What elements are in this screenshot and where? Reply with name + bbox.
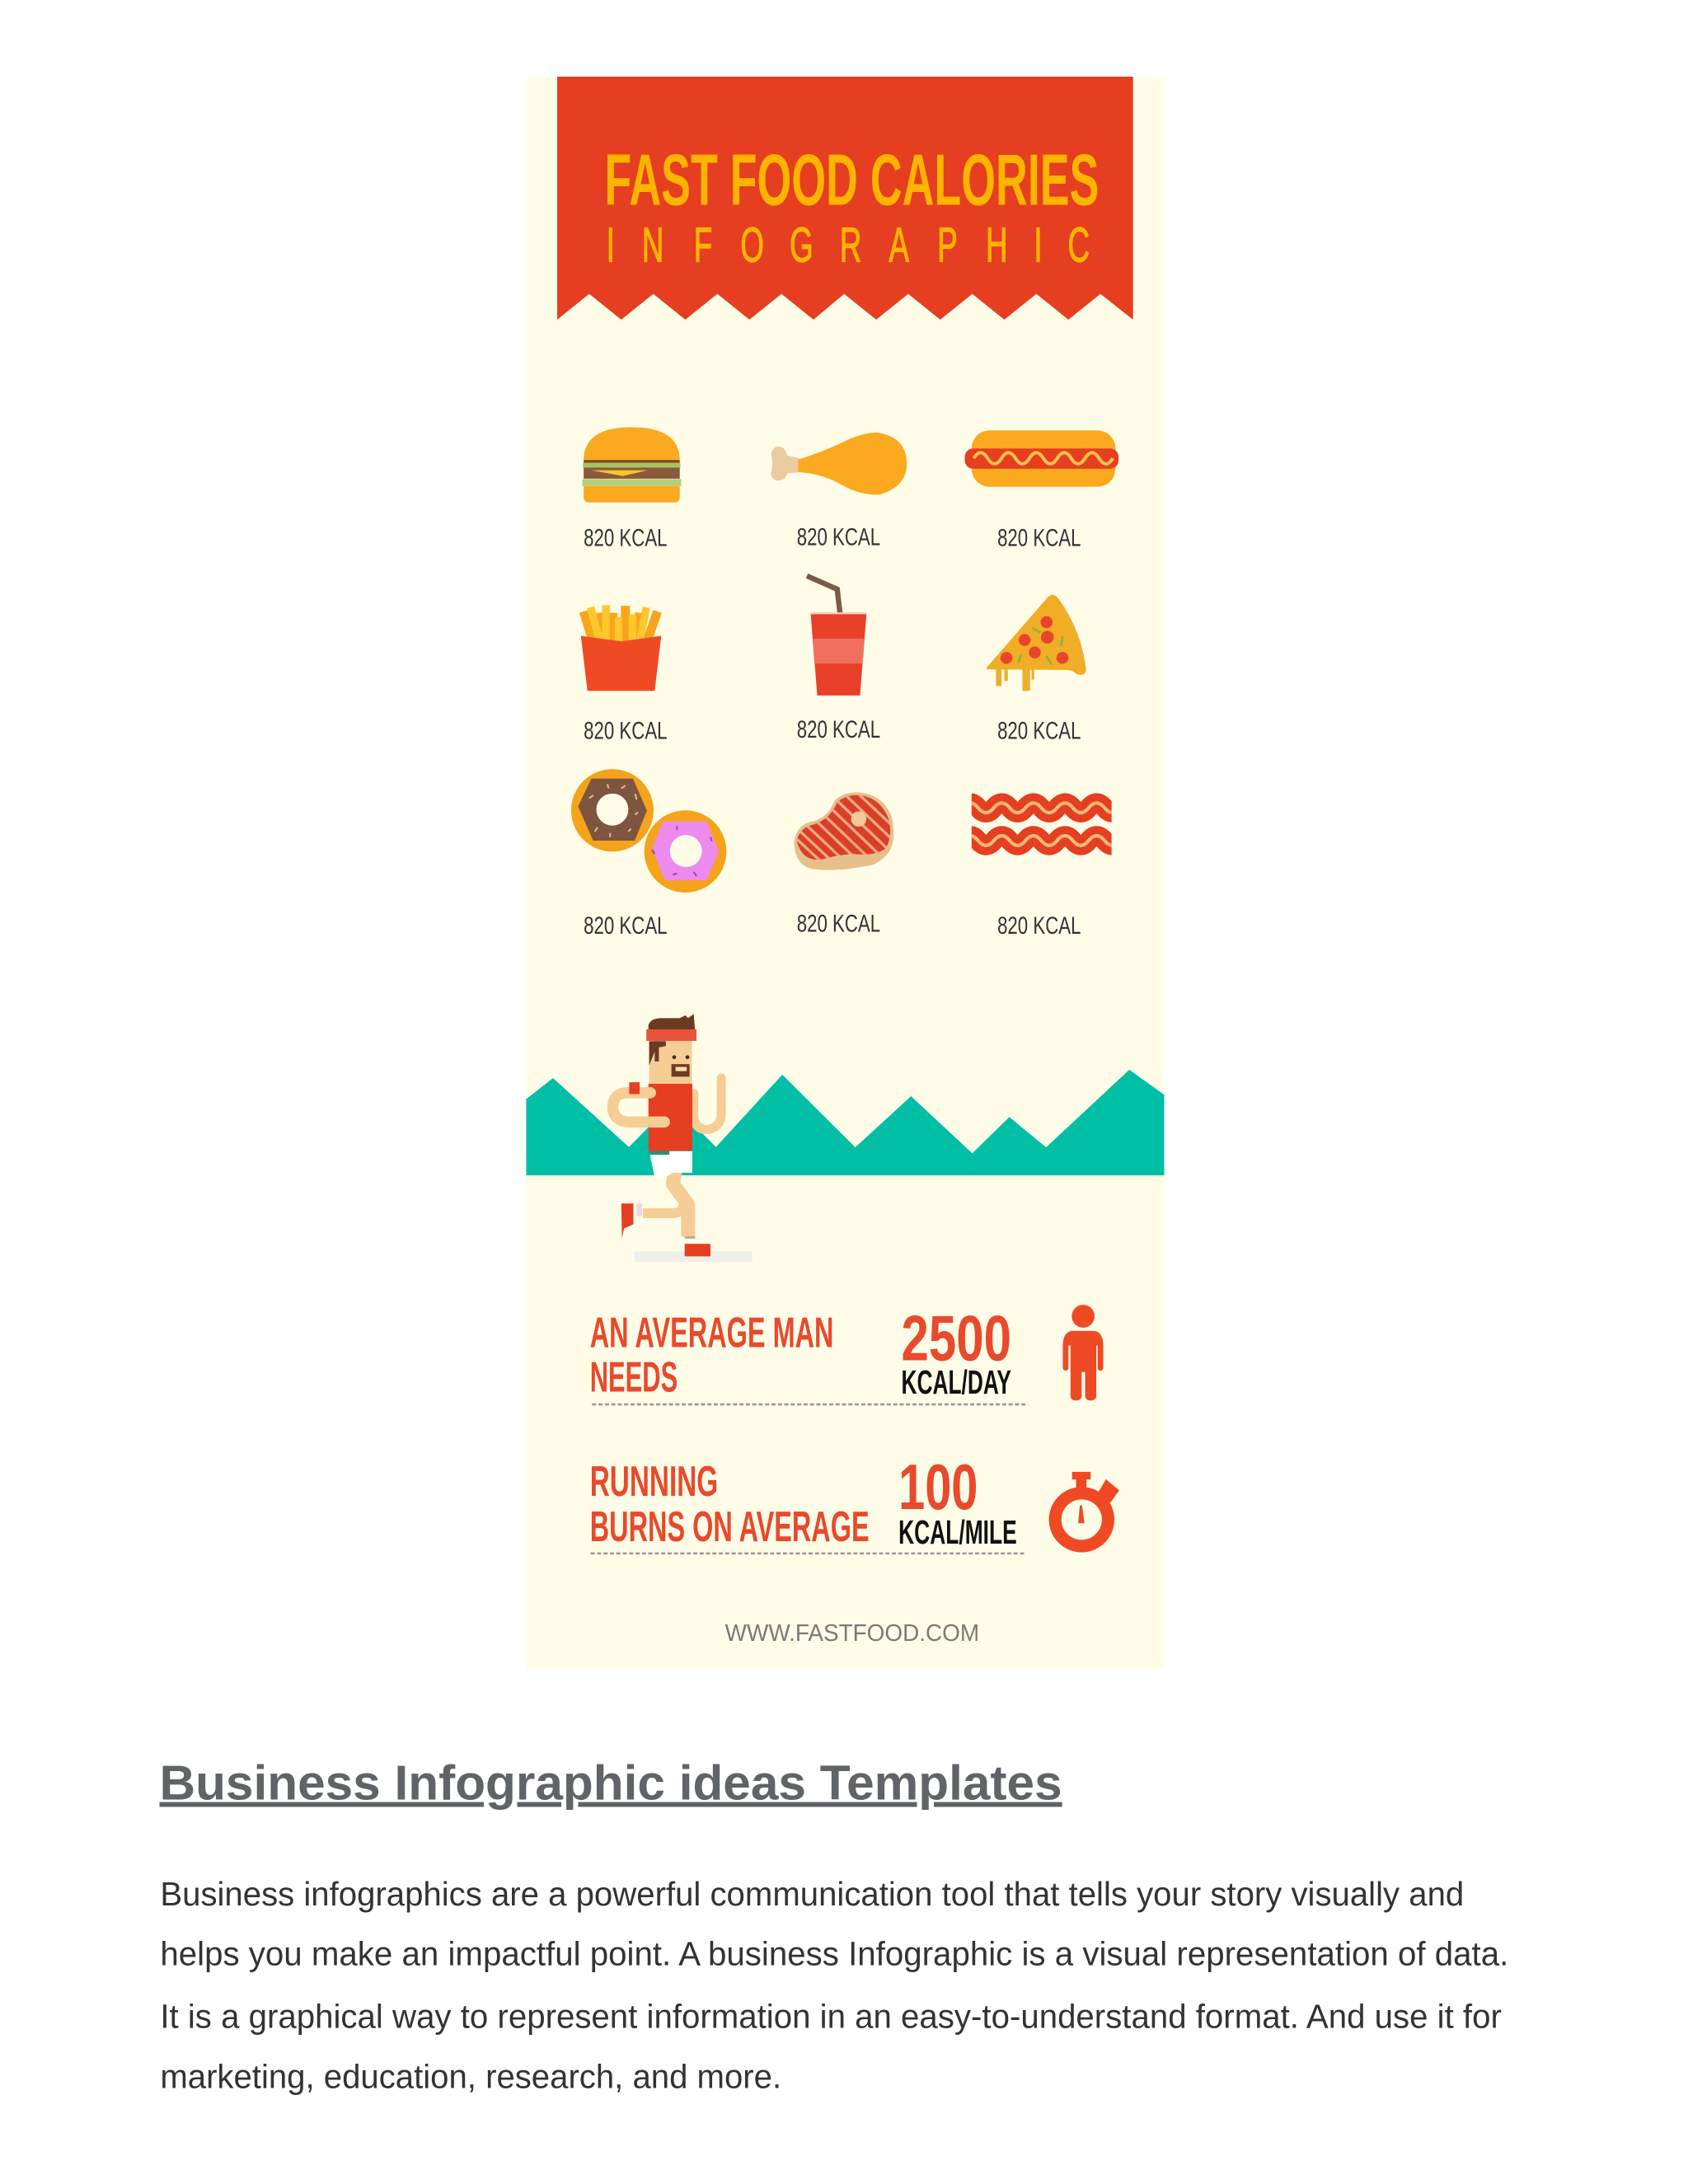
icon: hot dog [965,430,1118,487]
stat: average man: 2500 [901,1303,1011,1374]
calorie label: 820 KCAL [797,717,880,743]
calorie label: 820 KCAL [584,719,668,745]
article heading: Business Infographic ideas Templates [160,1755,1062,1811]
calorie label: 820 KCAL [797,912,880,938]
article paragraph: It is a graphical way to represent information in an easy-to-understand format. And use it for [160,1998,1502,2036]
mountains [527,1070,1165,1175]
icon: chicken leg [771,433,907,494]
icon: fries [581,605,661,691]
calorie label: 820 KCAL [797,525,880,551]
icon: drink cup [807,576,866,696]
calorie label: 820 KCAL [584,913,668,940]
stat: average man: NEEDS [590,1352,678,1400]
banner [557,77,1133,320]
icon: steak [794,792,893,870]
calorie label: 820 KCAL [997,526,1081,552]
article paragraph: Business infographics are a powerful communication tool that tells your story visually and [160,1875,1464,1913]
stat: average man: KCAL/DAY [901,1363,1011,1401]
panel: infographic [527,77,1165,1669]
stat: running [590,1452,1026,1554]
icon: stopwatch [1055,1472,1119,1546]
article paragraph: marketing, education, research, and more. [160,2057,781,2095]
calorie label: 820 KCAL [997,913,1081,940]
website: WWW.FASTFOOD.COM [725,1620,979,1647]
calorie label: 820 KCAL [997,719,1081,745]
icon: donuts [571,769,726,893]
stat: average man [590,1303,1028,1404]
stat: running: BURNS ON AVERAGE [590,1502,870,1550]
icon: pizza slice [987,595,1086,691]
stat: running: RUNNING [590,1457,718,1505]
calorie label: 820 KCAL [584,526,668,552]
stat: average man: AN AVERAGE MAN [590,1308,833,1356]
article paragraph [160,1875,1508,2095]
stat: running: 100 [898,1452,978,1523]
runner [613,1014,753,1262]
page canvas [160,77,1506,2095]
stat: running: KCAL/MILE [898,1513,1017,1551]
icon: person [1063,1305,1104,1400]
icon: burger [582,427,681,503]
icon: bacon [962,803,1120,846]
subtitle: INFOGRAPHIC [607,218,1090,273]
title: FAST FOOD CALORIES [604,138,1099,220]
article paragraph: helps you make an impactful point. A business Infographic is a visual representation of data. [160,1935,1508,1973]
